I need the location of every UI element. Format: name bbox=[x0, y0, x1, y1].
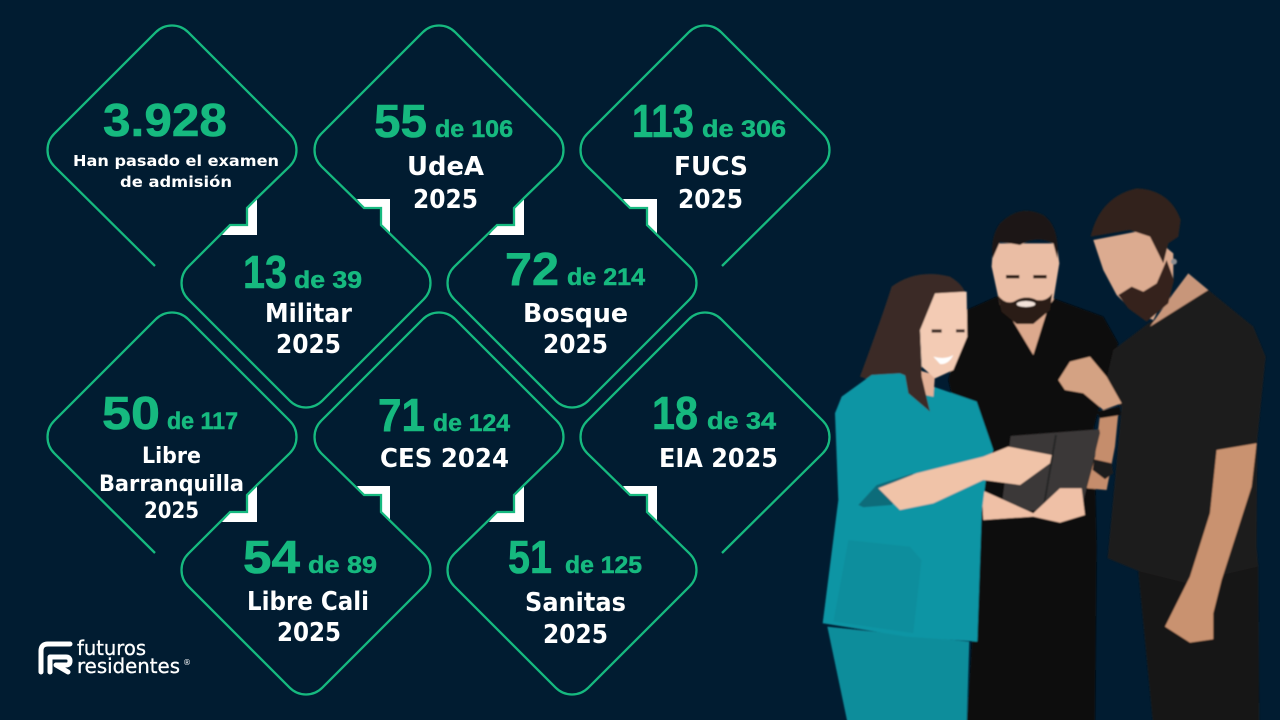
card: Bosque bbox=[505, 243, 646, 360]
watch bbox=[1093, 459, 1113, 479]
number: 3.928: 3.928 bbox=[103, 94, 227, 146]
card: UdeA bbox=[374, 95, 513, 215]
year: 2025 bbox=[543, 620, 608, 650]
total: de 306 bbox=[702, 116, 786, 143]
stat: 50 bbox=[102, 387, 160, 439]
tablet case bbox=[1001, 429, 1100, 512]
neck bbox=[907, 367, 935, 397]
shirt bbox=[1103, 290, 1266, 583]
eyes bbox=[932, 329, 965, 333]
card: FUCS bbox=[632, 95, 786, 215]
woman bbox=[823, 274, 1085, 720]
notch accents row two bbox=[222, 486, 657, 522]
center man bbox=[948, 211, 1118, 720]
diamond outlines upper chain bbox=[48, 26, 829, 407]
wordmark line two: residentes bbox=[77, 654, 180, 678]
name and year: CES 2024 bbox=[380, 444, 509, 474]
total: de 214 bbox=[567, 264, 646, 291]
neck bbox=[998, 297, 1052, 355]
trousers bbox=[827, 627, 969, 720]
card: Libre Cali bbox=[243, 531, 377, 648]
pocket shading bbox=[833, 540, 922, 633]
shirt and trousers bbox=[948, 297, 1118, 720]
stat: 51 bbox=[508, 531, 552, 583]
fist bbox=[1058, 357, 1122, 410]
mouth bbox=[1017, 301, 1035, 307]
stat: 71 bbox=[378, 389, 425, 441]
year: 2025 bbox=[413, 185, 478, 215]
card: Militar bbox=[243, 246, 362, 360]
total: de 89 bbox=[308, 552, 377, 579]
name: Sanitas bbox=[525, 588, 626, 618]
tablet hinge bbox=[1043, 435, 1056, 509]
front hair strand bbox=[895, 287, 935, 412]
stat: 54 bbox=[243, 531, 300, 583]
right man bbox=[1058, 188, 1266, 720]
caption line one: Han pasado el examen bbox=[73, 152, 279, 170]
eyes bbox=[1006, 275, 1047, 278]
card: Sanitas bbox=[508, 531, 642, 650]
card: Libre Barranquilla bbox=[99, 387, 244, 524]
hair bbox=[860, 274, 967, 410]
name: FUCS bbox=[674, 152, 748, 182]
face bbox=[992, 243, 1059, 323]
total: de 39 bbox=[294, 267, 362, 294]
name: Bosque bbox=[523, 299, 628, 329]
wordmark line one: futuros bbox=[77, 636, 146, 660]
year: 2025 bbox=[678, 185, 743, 215]
card: EIA bbox=[652, 387, 778, 474]
year: 2025 bbox=[277, 618, 341, 648]
total: de 106 bbox=[435, 116, 513, 143]
name line one: Libre bbox=[142, 444, 201, 469]
total: de 124 bbox=[433, 410, 511, 437]
wristband bbox=[1097, 407, 1121, 418]
name: Militar bbox=[265, 299, 352, 329]
stat: 72 bbox=[505, 243, 559, 295]
neck bbox=[1150, 273, 1208, 327]
beard bbox=[998, 293, 1052, 324]
trousers bbox=[1138, 563, 1259, 720]
total: de 34 bbox=[707, 408, 777, 435]
forearm and hand bbox=[878, 447, 1052, 510]
stat: 13 bbox=[243, 246, 287, 298]
name line two: Barranquilla bbox=[99, 472, 244, 497]
sleeve shadow bbox=[858, 473, 913, 507]
stat: 113 bbox=[632, 95, 694, 147]
stat: 55 bbox=[374, 95, 427, 147]
earring bbox=[1171, 259, 1177, 265]
forearm with hand bbox=[1165, 443, 1257, 643]
year: 2025 bbox=[276, 330, 341, 360]
name: Libre Cali bbox=[247, 587, 369, 617]
photo: three medical residents looking at a tablet bbox=[823, 188, 1266, 720]
tablet bbox=[1001, 429, 1100, 512]
diamond outlines lower chain bbox=[48, 313, 829, 694]
icon: FR monogram bbox=[41, 644, 70, 672]
year: 2025 bbox=[144, 499, 199, 524]
logo: futuros residentes bbox=[41, 636, 191, 678]
hair bbox=[992, 211, 1058, 258]
caption line two: de admisión bbox=[120, 173, 232, 191]
beard bbox=[1118, 260, 1174, 322]
hair bbox=[1091, 188, 1181, 263]
name and year: EIA 2025 bbox=[659, 444, 778, 474]
registered mark: ® bbox=[183, 658, 191, 667]
card: total admission exam bbox=[73, 94, 279, 191]
total: de 117 bbox=[167, 408, 238, 435]
name: UdeA bbox=[407, 152, 484, 182]
upper arm near tablet bbox=[1087, 413, 1118, 490]
face bbox=[1093, 230, 1173, 320]
scrub top bbox=[823, 373, 993, 642]
far arm bbox=[982, 488, 1085, 523]
mouth bbox=[933, 355, 953, 364]
card: CES bbox=[378, 389, 511, 474]
notch accents row one bbox=[222, 199, 657, 235]
face bbox=[920, 292, 967, 378]
total: de 125 bbox=[565, 552, 642, 579]
stat: 18 bbox=[652, 387, 698, 439]
year: 2025 bbox=[543, 330, 608, 360]
